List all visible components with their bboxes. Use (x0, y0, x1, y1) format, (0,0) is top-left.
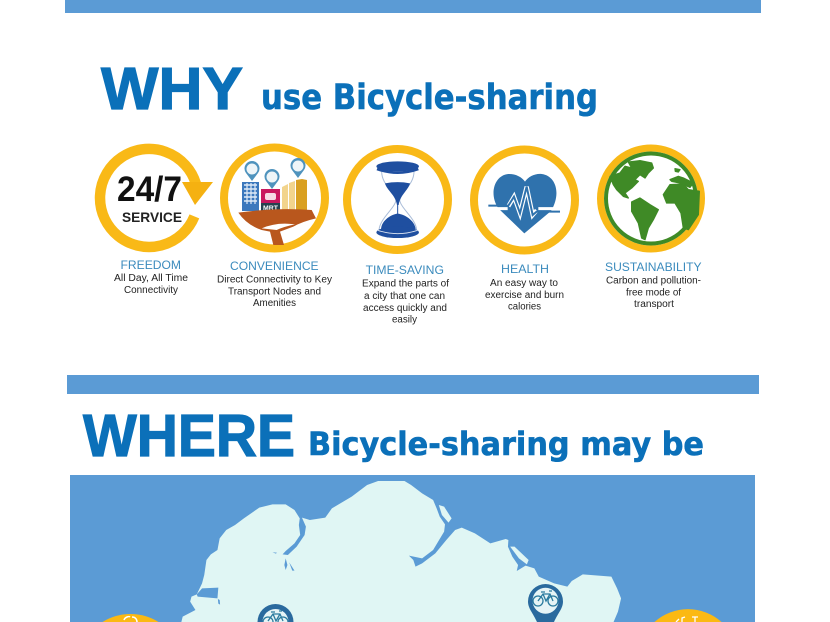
text: freedom caption (114, 258, 188, 296)
panel: convenience (217, 148, 332, 309)
text: sustainability caption: SUSTAINABILITY (605, 260, 702, 274)
text: health caption (485, 262, 564, 312)
text: convenience caption: Direct Connectivity to Key (217, 274, 332, 286)
text: time-saving caption (362, 263, 449, 326)
heading: why use bicycle-sharing: WHY (101, 56, 243, 122)
text: sustainability caption: free mode of (626, 288, 681, 298)
text: time-saving caption: Expand the parts of (362, 278, 449, 290)
map: island landmass (181, 481, 621, 622)
heading: why use bicycle-sharing: use Bicycle-sharing (261, 78, 598, 118)
text: sustainability caption (605, 260, 702, 310)
text: health caption: exercise and burn (485, 290, 564, 301)
pin: bicycle location east (528, 584, 563, 622)
icon: heart with pulse (474, 150, 575, 250)
text: sustainability caption: Carbon and pollution- (606, 276, 701, 286)
text: health caption: calories (508, 302, 541, 312)
pin: bicycle location west (258, 604, 294, 622)
heading: where bicycle-sharing may be: WHERE (83, 403, 295, 469)
heading: why use bicycle-sharing (101, 56, 598, 122)
second banner bar (67, 375, 759, 394)
text: convenience caption: CONVENIENCE (230, 259, 319, 273)
icon: hourglass (347, 149, 448, 250)
icon: city on a hand (224, 148, 325, 248)
text: health caption: An easy way to (490, 278, 558, 289)
text: time-saving caption: a city that one can (364, 291, 445, 302)
icon: 24/7 service: 24/7 (117, 170, 182, 209)
top banner bar (65, 0, 761, 13)
text: sustainability caption: transport (634, 299, 674, 310)
text: time-saving caption: easily (392, 314, 417, 326)
text: time-saving caption: TIME-SAVING (366, 263, 444, 277)
panel: map of Singapore (70, 475, 755, 622)
text: freedom caption: FREEDOM (120, 258, 181, 272)
text: convenience caption (217, 259, 332, 309)
text: convenience caption: Transport Nodes and (228, 286, 321, 298)
badge: yellow circle right (654, 609, 722, 622)
text: freedom caption: All Day, All Time (114, 273, 188, 284)
panel: freedom (100, 149, 213, 296)
panel: time-saving (347, 149, 449, 326)
heading: where bicycle-sharing may be: Bicycle-sharing may be (308, 425, 704, 463)
icon: globe (600, 148, 702, 249)
text: health caption: HEALTH (501, 262, 549, 276)
panel: health (474, 150, 575, 312)
icon: 24/7 service: SERVICE (122, 209, 182, 225)
icon: 24/7 service (100, 149, 213, 247)
panel: sustainability (600, 148, 702, 310)
heading: where bicycle-sharing may be (83, 403, 704, 469)
badge: yellow circle left (102, 614, 158, 622)
icon: city on a hand: MRT (263, 205, 278, 212)
text: convenience caption: Amenities (253, 298, 296, 309)
text: freedom caption: Connectivity (124, 285, 178, 296)
text: time-saving caption: access quickly and (363, 303, 447, 314)
